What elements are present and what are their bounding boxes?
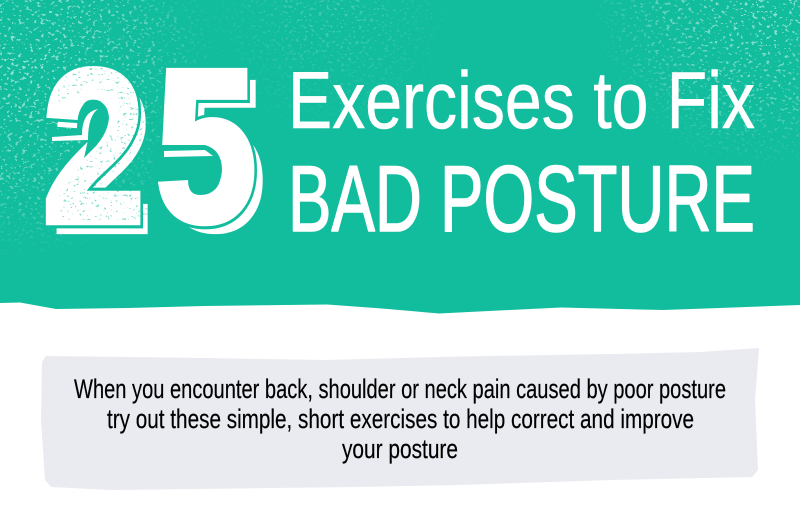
- digit 2: 2: [44, 27, 143, 266]
- digit 2: 2: [53, 38, 152, 277]
- panel background: [41, 348, 759, 490]
- intro text: [74, 374, 726, 464]
- intro text: your posture: [342, 434, 458, 464]
- digit 2: [43, 63, 152, 234]
- digit 5: 5: [157, 28, 255, 265]
- digit 2: 2: [44, 27, 143, 266]
- green header band: [0, 0, 800, 314]
- digit 5: 5: [157, 28, 255, 265]
- speckle texture: [0, 0, 800, 252]
- intro panel: [41, 348, 759, 490]
- big number 25: [43, 63, 263, 234]
- digit 5: 5: [167, 38, 265, 275]
